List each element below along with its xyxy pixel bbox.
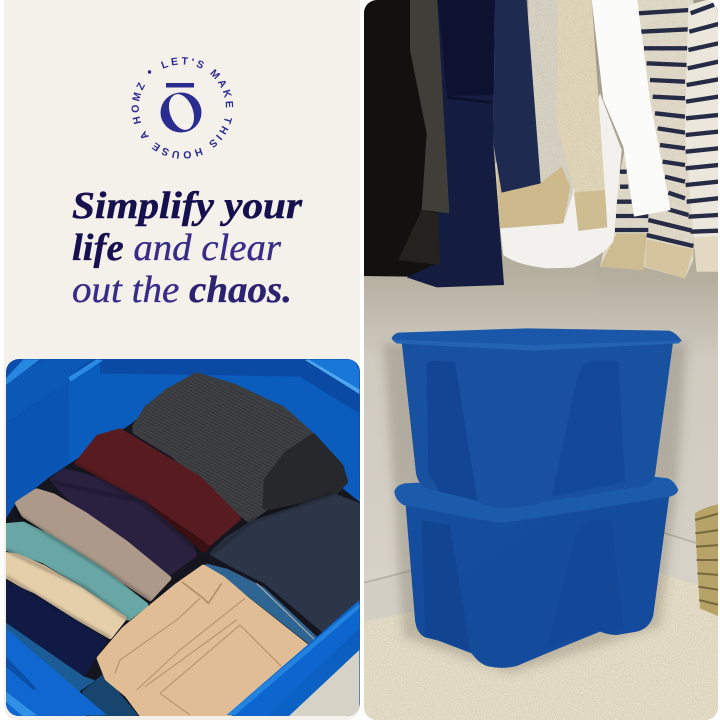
headline: Simplify your (72, 185, 303, 227)
folded clothes stack (3, 375, 362, 717)
garment: teal sweater (3, 524, 146, 618)
upper bin (392, 328, 682, 508)
fold shadows between garments (6, 465, 333, 638)
lower bin lid (394, 477, 678, 522)
garment: grey cardigan (410, 0, 449, 213)
garment: aubergine sweater (53, 471, 194, 572)
garment: navy sweater (3, 583, 104, 674)
headline (72, 185, 303, 311)
shadow mass under the stack (6, 420, 360, 716)
photo: closet with hanging clothes and stacked bins (364, 0, 720, 720)
garment: charcoal ribbed sweater (135, 375, 345, 520)
woven basket (695, 504, 719, 617)
photo: folded clothes in open blue bin (0, 357, 365, 720)
baseboards (364, 532, 696, 584)
stacked blue storage bins (383, 328, 687, 673)
garment: navy dress (407, 0, 504, 287)
badge dot (148, 70, 151, 74)
bin rim, front right (227, 600, 359, 717)
garment: striped sweater (600, 0, 718, 278)
garment: maroon shirt (78, 431, 238, 550)
dress waist band (447, 97, 492, 103)
striped sleeve (685, 0, 718, 272)
garment: taupe sweater (18, 491, 169, 598)
logo mark: o with macron (160, 83, 202, 133)
bin interior (0, 357, 365, 720)
carpet floor (364, 572, 720, 720)
upper bin body (402, 340, 673, 508)
garment: beige knit sweater (495, 0, 607, 231)
lower bin body (405, 490, 670, 668)
garment: dark slate sweater (213, 496, 362, 634)
bin rim, front left (6, 628, 107, 717)
headline: out the chaos. (72, 269, 292, 311)
lower bin (394, 477, 678, 668)
logo badge: let's make this house a homz (132, 57, 234, 159)
soft shadow behind bins (383, 343, 687, 673)
closet wall (364, 0, 596, 720)
garment: grey cardigan hem (398, 210, 440, 265)
garment: bottom denim (83, 675, 137, 715)
garment: cream shirt (3, 554, 124, 636)
upper bin lid (392, 328, 682, 351)
garment: black dress (364, 0, 440, 277)
panel: cream headline card (4, 0, 360, 720)
garment: denim jeans (207, 565, 315, 643)
garment: white shirt (500, 0, 671, 268)
garment: navy sleeve (493, 0, 541, 193)
garment: blue underlayer (6, 624, 93, 693)
floor corner (288, 650, 359, 717)
garment: folded khaki trousers (99, 567, 307, 717)
hanging clothes (364, 0, 718, 287)
headline: life and clear (72, 227, 282, 269)
circular slogan text: LET'S MAKE THIS HOUSE A HOMZ (132, 57, 234, 159)
